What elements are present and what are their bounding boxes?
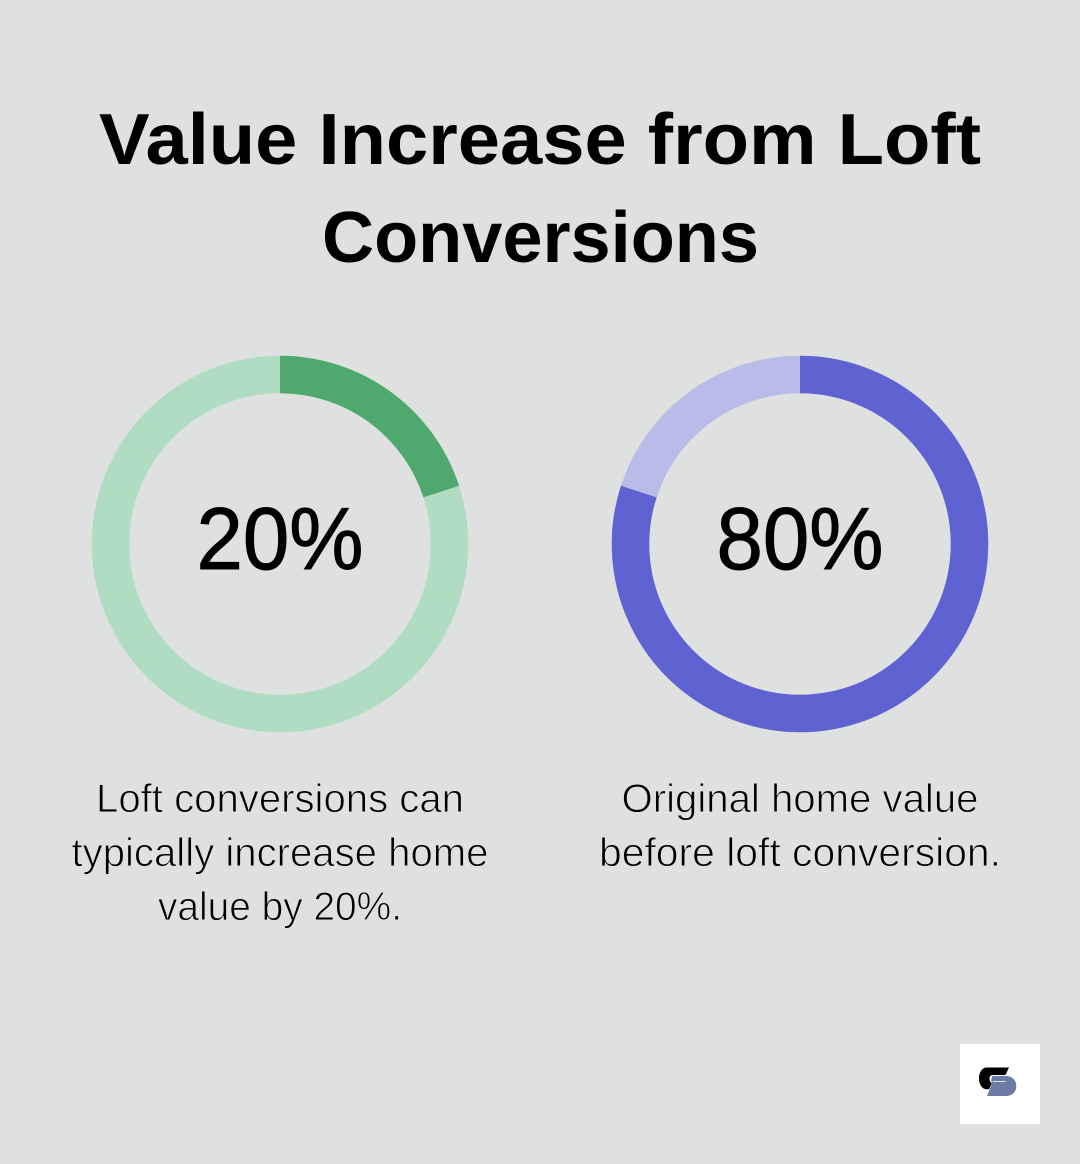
value: 20%: 20% [196,489,364,588]
donut chart: 80% [630,374,970,714]
description: 20%: value by 20%. [158,885,402,929]
title [99,100,981,278]
panel: 20% loft conversion uplift [72,374,488,929]
value: 80%: 80% [716,489,884,588]
description: 80%: Original home value [622,777,978,821]
description: 20% [72,777,488,929]
title: Conversions [322,198,759,278]
donut chart: 20% [110,374,450,714]
logo badge [960,1044,1040,1124]
description: 80% [599,777,1001,875]
panel: 80% original home value [599,374,1001,875]
title: Value Increase from Loft [99,100,981,180]
description: 20%: Loft conversions can [96,777,464,821]
logo: S mark [979,1068,1016,1096]
description: 80%: before loft conversion. [599,831,1001,875]
description: 20%: typically increase home [72,831,488,875]
